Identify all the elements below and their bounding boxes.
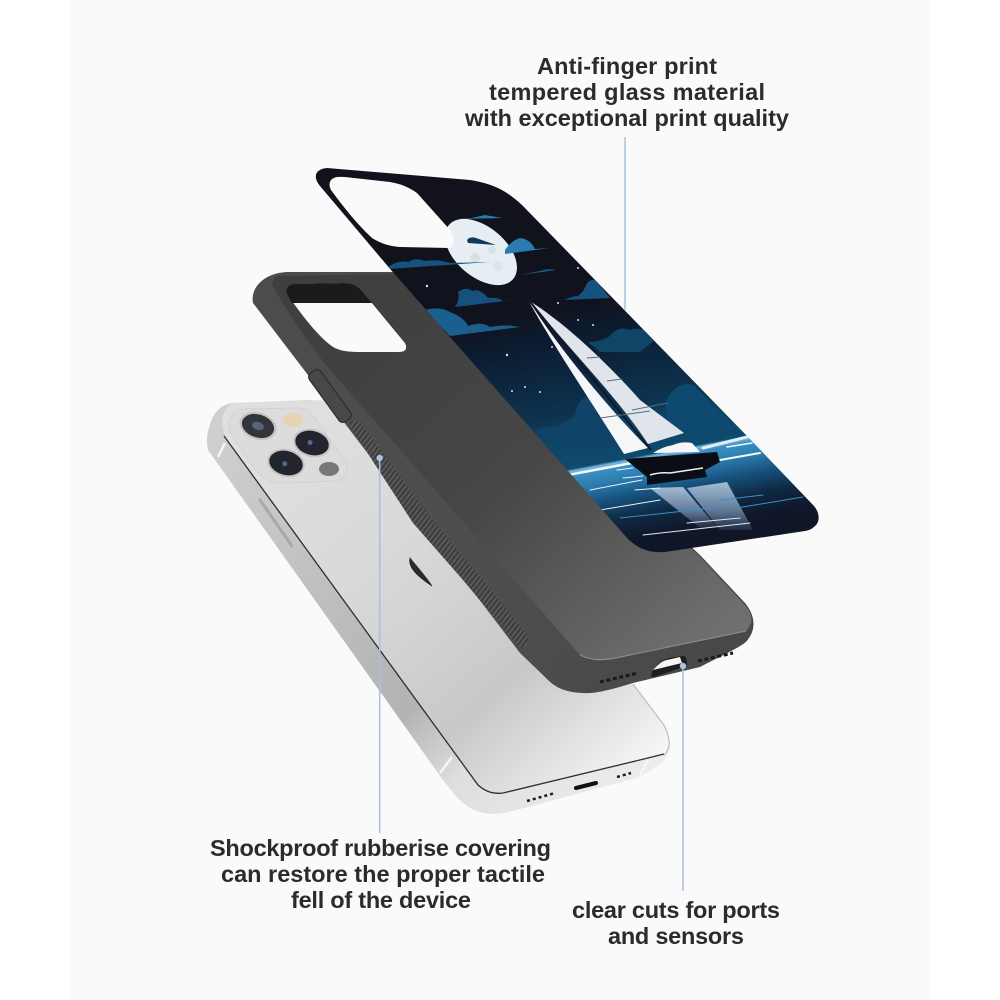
cutout interior band (286, 283, 372, 303)
moon (448, 218, 517, 286)
stars (426, 267, 594, 393)
grip texture (350, 420, 528, 647)
black case (253, 272, 754, 693)
callout line: glass (624, 137, 626, 310)
antenna bands (218, 443, 648, 775)
phone speaker holes left (527, 793, 555, 801)
phone charging port (576, 783, 596, 788)
case port cutout (652, 656, 687, 677)
tempered glass back with sailboat print (300, 160, 830, 560)
case speaker holes right (698, 653, 733, 661)
case back plate (272, 274, 751, 660)
sail seams (587, 357, 668, 418)
lens middle (290, 425, 334, 461)
clouds low sky (534, 384, 721, 436)
boat cabin (653, 442, 700, 453)
camera hole in glass (330, 177, 454, 248)
text: shockproof covering: fell of the device (291, 887, 471, 913)
phone speaker holes right (617, 773, 631, 777)
boat reflection right (687, 482, 753, 530)
text: clear cuts (572, 897, 780, 949)
text: glass material: with exceptional print quality (464, 105, 789, 131)
right sail (531, 302, 684, 444)
infographic canvas (207, 57, 819, 944)
boat hull (625, 452, 720, 485)
text: shockproof covering: can restore the proper tactile (221, 861, 545, 887)
glass artwork (300, 160, 830, 560)
case speaker holes left (600, 673, 638, 682)
lens bottom (264, 445, 308, 481)
text: glass material: Anti-finger print (537, 53, 717, 79)
phone frame (207, 400, 670, 814)
clouds mid sky (425, 280, 655, 352)
boat reflection left (650, 487, 717, 528)
mast (527, 298, 651, 450)
camera bump (229, 408, 347, 483)
sensor (319, 462, 339, 476)
text: glass material: tempered glass material (489, 79, 765, 105)
text: glass material (464, 53, 789, 131)
hull waves (650, 468, 703, 475)
lens top (236, 407, 280, 445)
plate right edge (633, 684, 669, 755)
left sail (527, 298, 648, 454)
phone back plate (222, 400, 669, 794)
case body with camera cutout (253, 272, 754, 693)
sky and sea gradient (300, 160, 830, 560)
callout line: rubber covering (376, 455, 383, 833)
port opening (653, 657, 682, 670)
apple logo sliver (410, 558, 432, 586)
flash (283, 413, 303, 427)
side button (260, 500, 292, 546)
clouds near moon (388, 215, 556, 275)
text: shockproof covering (210, 835, 551, 913)
silver phone (207, 400, 670, 814)
text: clear cuts: clear cuts for ports (572, 897, 780, 923)
text: shockproof covering: Shockproof rubberise covering (210, 835, 551, 861)
frame edge line (224, 436, 664, 793)
side button (307, 368, 353, 424)
text: clear cuts: and sensors (608, 923, 744, 949)
plate edge highlight (580, 631, 746, 660)
callout line: cuts (680, 663, 686, 891)
water surface lines (568, 437, 803, 535)
